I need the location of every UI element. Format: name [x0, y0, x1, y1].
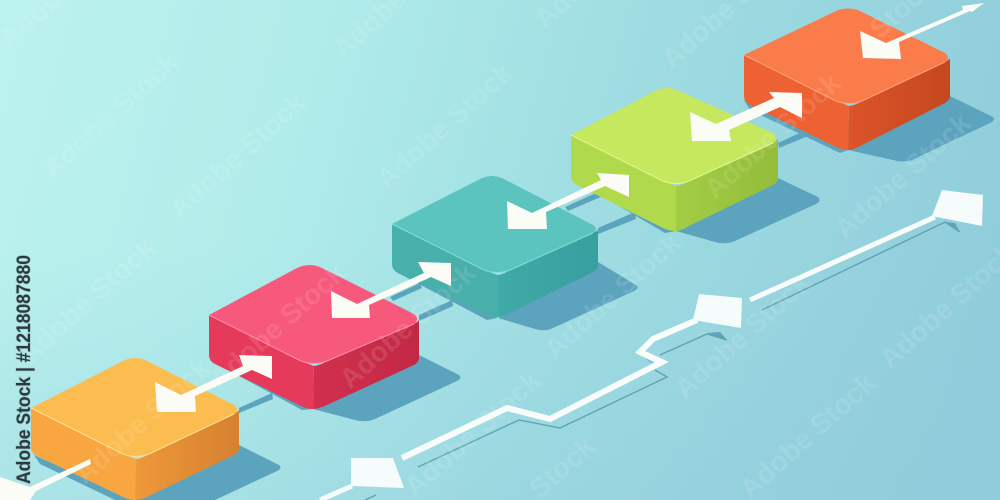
watermark: Adobe Stock — [13, 232, 162, 369]
watermark: Adobe Stock — [398, 365, 547, 500]
lower path: white line with markers — [320, 190, 983, 500]
block: teal — [392, 176, 598, 317]
watermark: Adobe Stock — [828, 107, 977, 244]
lower path: shadow line — [365, 222, 960, 500]
stock id label: Adobe Stock | #1218087880 — [14, 255, 35, 484]
arrow: green to orange-red — [690, 92, 802, 141]
marker: upper — [932, 190, 983, 226]
watermark: Adobe Stock — [370, 57, 519, 194]
block: orange — [31, 358, 239, 500]
watermark: Adobe Stock — [203, 257, 352, 394]
watermark: Adobe Stock — [68, 352, 217, 489]
arrow: red to teal — [331, 262, 451, 318]
block shadows — [34, 96, 994, 500]
watermark: Adobe Stock — [538, 227, 687, 364]
watermark: Adobe Stock — [36, 47, 185, 184]
arrow: orange to red — [155, 355, 272, 412]
watermark: Adobe Stock — [333, 257, 482, 394]
arrow: entering orange block — [0, 459, 91, 500]
marker: lower — [351, 458, 404, 488]
watermark: Adobe Stock — [163, 87, 312, 224]
arrow: into orange-red block and exit — [860, 3, 984, 59]
watermark: Adobe Stock — [698, 67, 847, 204]
marker: middle — [693, 294, 742, 328]
block: green — [571, 88, 778, 231]
block: orange-red — [744, 8, 950, 150]
arrow: teal to green — [507, 173, 629, 229]
block: red — [209, 265, 419, 409]
watermark: Adobe Stock — [668, 267, 817, 404]
